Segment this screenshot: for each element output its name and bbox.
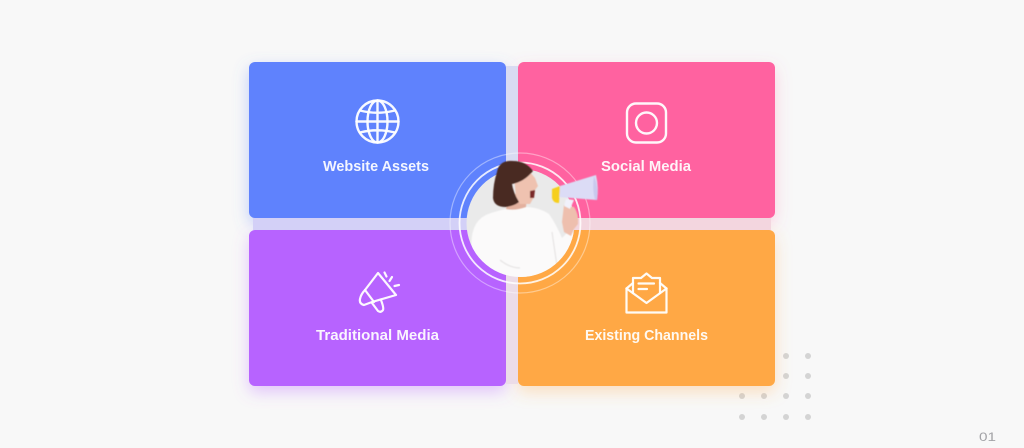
panel: Website Assets [249,62,506,218]
photo circle [466,170,574,277]
label: Traditional Media: Traditional Media [316,328,440,344]
sweater [471,207,574,277]
outer ring [450,153,590,293]
icon: megaphone [360,272,399,312]
panel: Existing Channels [518,230,775,386]
panel: Traditional Media [249,230,506,386]
central portrait with rings [450,153,598,293]
gaps between cards tinted by shadows [253,66,771,384]
dot grid decoration [739,353,811,420]
inner ring [460,162,580,284]
page number: 01 [979,432,996,444]
hand and forearm [562,205,578,236]
icon: instagram [627,104,666,142]
woman's hair [493,161,533,207]
panel: Social Media [518,62,775,218]
label: Existing Channels: Existing Channels [585,328,708,344]
label: Website Assets: Website Assets [323,159,429,175]
icon: envelope [626,274,666,312]
label: Social Media: Social Media [601,159,692,175]
woman's neck and face [493,161,538,210]
megaphone [552,175,598,209]
icon: globe [356,100,398,142]
